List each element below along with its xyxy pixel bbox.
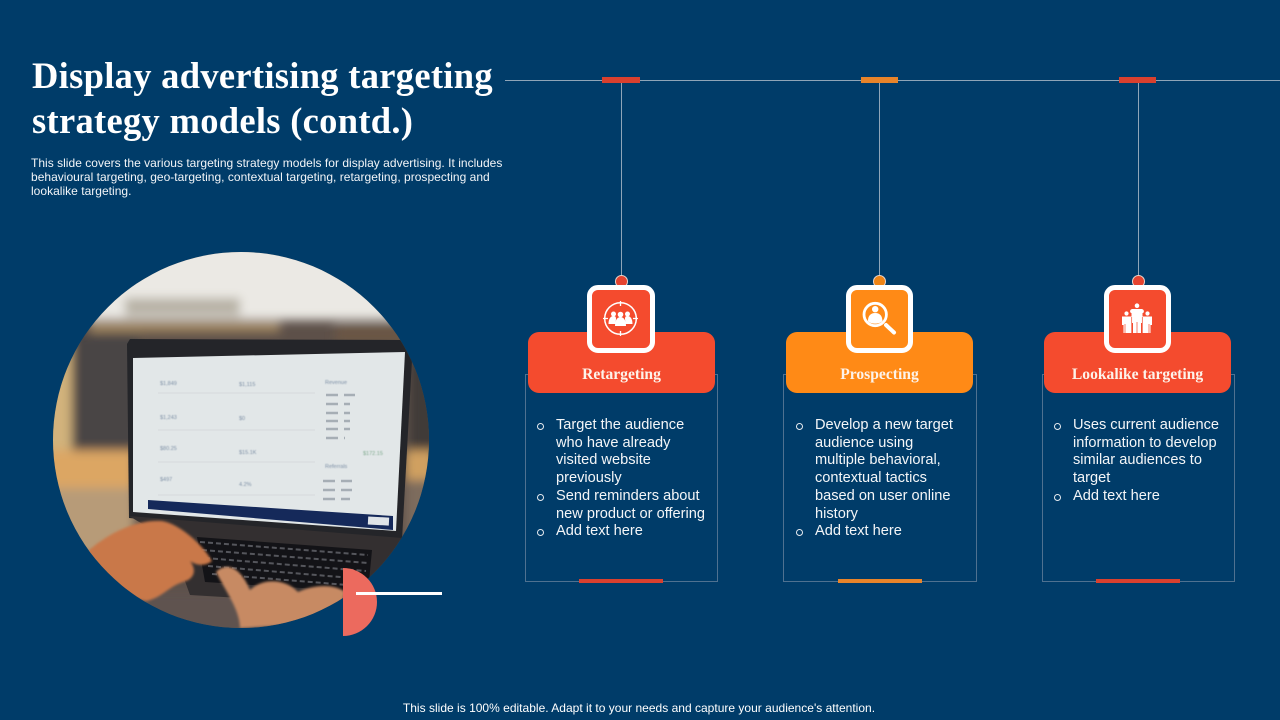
photo: hands typing on laptop showing a dashboard: $1,243 (160, 415, 177, 421)
bullet list: similar audiences to (1073, 452, 1202, 468)
bullet list: Send reminders about (556, 488, 700, 504)
icon: audience target (587, 285, 655, 353)
photo: hands typing on laptop showing a dashboard: $15.1K (239, 450, 257, 456)
photo: hands typing on laptop showing a dashboard: $0 (239, 416, 245, 422)
bullet list: history (815, 506, 858, 522)
hands (86, 521, 345, 628)
keyboard (197, 537, 372, 592)
bullet list: Target the audience (556, 417, 684, 433)
photo: hands typing on laptop showing a dashboard: $172.15 (363, 451, 383, 457)
connector dot (1132, 275, 1145, 288)
dashboard screen (133, 352, 405, 531)
bullet list: visited website (556, 452, 651, 468)
bullet list (1054, 417, 1219, 504)
bullet list: who have already (556, 435, 670, 451)
bullet list: previously (556, 470, 622, 486)
header band (1044, 332, 1231, 393)
bullet list: Uses current audience (1073, 417, 1219, 433)
bullet list: information to develop (1073, 435, 1217, 451)
description text: lookalike targeting. (31, 184, 131, 198)
icon: group of people (1104, 285, 1171, 353)
bullet list (796, 417, 953, 539)
description text (31, 156, 502, 198)
photo: hands typing on laptop showing a dashboard: $1,849 (160, 381, 177, 387)
photo: hands typing on laptop showing a dashboard: 4.2% (239, 482, 252, 488)
bullet list: contextual tactics (815, 470, 927, 486)
bullet list: Add text here (1073, 488, 1160, 504)
heading: Lookalike targeting (1072, 366, 1203, 383)
photo: hands typing on laptop showing a dashboard: Revenue (325, 380, 347, 386)
title (32, 55, 493, 141)
bullet list (537, 417, 705, 539)
content box (1042, 374, 1235, 582)
title: strategy models (contd.) (32, 100, 413, 141)
timeline connector with tabs (505, 77, 1280, 275)
photo: hands typing on laptop showing a dashboard (53, 252, 429, 628)
accent semicircle with white line (343, 568, 442, 636)
bullet list: based on user online (815, 488, 950, 504)
photo: hands typing on laptop showing a dashboard: Referrals (325, 464, 348, 470)
icon: person search (846, 285, 913, 353)
content box (783, 374, 977, 582)
panel: Lookalike targeting (1042, 275, 1235, 583)
content box (525, 374, 718, 582)
laptop bezel (127, 339, 412, 540)
header band (528, 332, 715, 393)
bullet list: target (1073, 470, 1110, 486)
header band (786, 332, 973, 393)
bullet list: multiple behavioral, (815, 452, 941, 468)
accent bar (1096, 579, 1180, 583)
bullet list: Add text here (815, 523, 902, 539)
bullet list: Add text here (556, 523, 643, 539)
photo: hands typing on laptop showing a dashboard: $1,115 (239, 382, 255, 388)
heading: Prospecting (840, 366, 919, 383)
photo: hands typing on laptop showing a dashboard: $497 (160, 477, 172, 483)
title: Display advertising targeting (32, 55, 493, 96)
description text: behavioural targeting, geo-targeting, contextual targeting, retargeting, prospecting and (31, 170, 490, 184)
connector dot (615, 275, 628, 288)
footer note: This slide is 100% editable. Adapt it to your needs and capture your audience's attention. (403, 701, 875, 715)
panel: Retargeting (525, 275, 718, 583)
accent bar (579, 579, 663, 583)
accent bar (838, 579, 922, 583)
panel: Prospecting (783, 275, 977, 583)
heading: Retargeting (582, 366, 661, 383)
bullet list: audience using (815, 435, 913, 451)
bullet list: Develop a new target (815, 417, 953, 433)
bullet list: new product or offering (556, 506, 705, 522)
connector dot (873, 275, 886, 288)
photo: hands typing on laptop showing a dashboard: $80.25 (160, 446, 177, 452)
description text: This slide covers the various targeting strategy models for display advertising. It includes (31, 156, 502, 170)
laptop base (129, 516, 402, 605)
